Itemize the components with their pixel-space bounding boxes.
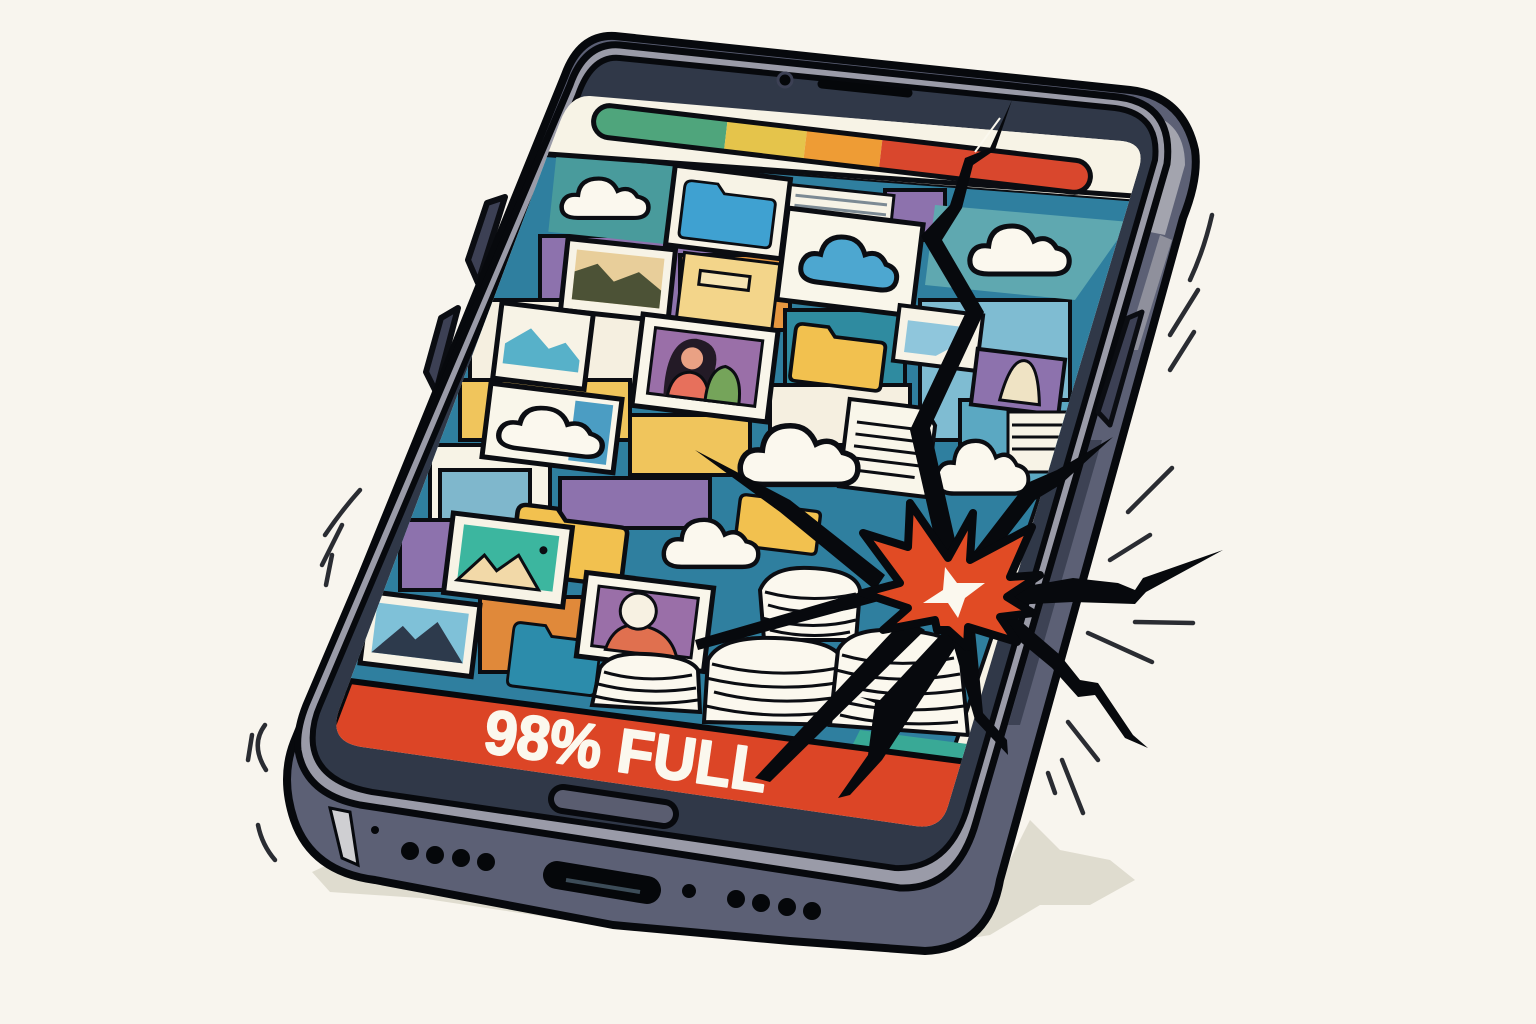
screen: [336, 96, 1141, 827]
bottom speaker dots left: [371, 826, 495, 871]
stack: top: [760, 568, 860, 640]
storage bar: [592, 104, 1092, 194]
stack: left: [592, 654, 700, 712]
tile: cloud on teal right: [925, 205, 1130, 300]
tile: yellow folder left: [510, 504, 629, 586]
screen background: [336, 96, 1141, 827]
tile: pale blue card: [893, 305, 983, 371]
tile: blue folder bottom: [507, 622, 602, 696]
tile: yellow folder center: [735, 494, 822, 555]
tile: teal landscape: [444, 513, 572, 607]
charging port: [557, 875, 647, 892]
tile: cloud on teal: [548, 154, 674, 244]
paper stacks: [592, 568, 968, 735]
motion lines: [248, 215, 1212, 860]
phone front face: [298, 45, 1168, 888]
right side highlights: [953, 118, 1185, 817]
storage bar top white band: [540, 96, 1160, 200]
bottom speaker dots right: [682, 884, 821, 920]
phone: [287, 36, 1196, 951]
stack: right: [830, 630, 968, 735]
bottom left strip: [330, 808, 358, 865]
tile: yellow folder card: [676, 252, 780, 332]
impact starburst: [863, 503, 1040, 647]
tile: purple with beige peak: [971, 349, 1065, 415]
tile: dark landscape: [360, 591, 480, 677]
display bezel: [313, 58, 1156, 868]
front camera: [778, 73, 792, 87]
tile: document: [839, 399, 937, 497]
main crack: [910, 100, 1012, 553]
cracks: [695, 100, 1223, 798]
tile: large white cloud: [740, 426, 858, 484]
red status banner: [336, 678, 962, 827]
tile: light blue landscape: [493, 303, 593, 389]
stack: center: [704, 638, 848, 725]
banner label: 98% FULL: [480, 698, 772, 806]
left side buttons: [426, 197, 505, 392]
tile: family photo: [632, 314, 778, 422]
right side button: [1098, 312, 1142, 425]
speaker grille: [822, 84, 908, 93]
home button: [563, 799, 664, 814]
ground shadow: [312, 820, 1135, 950]
tile: person photo: [576, 573, 714, 671]
tile: blue folder: [666, 165, 790, 259]
tile: right cloud and document: [937, 412, 1068, 494]
phone body: [287, 36, 1196, 951]
tile: framed cloud: [482, 383, 622, 473]
tile: olive landscape: [561, 239, 675, 321]
tile: text document: [790, 183, 896, 218]
tile: yellow folder: [789, 323, 887, 391]
tile: white cloud: [664, 520, 758, 567]
radiating cracks: [695, 450, 885, 590]
colored patches: [330, 155, 1140, 760]
crack highlights: [975, 118, 1000, 152]
tile: blue cloud: [777, 208, 923, 316]
teal strip: [853, 730, 966, 764]
